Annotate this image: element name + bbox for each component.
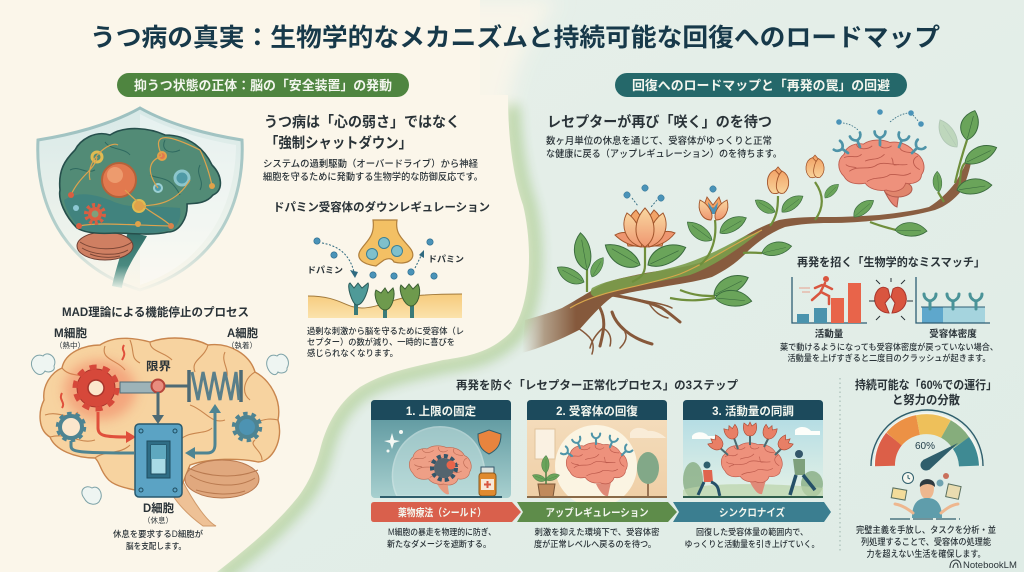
icon: steam clouds	[31, 354, 288, 504]
text block: waiting description: な健康に戻る（アップレギュレーション）のを待ちます。	[546, 148, 782, 160]
icon: shield with green brain	[38, 108, 242, 290]
text block: dopamine description: セプター）の数が減り、一時的に喜びを	[307, 336, 455, 347]
text block: shutdown description: 細胞を守るために発動する生物学的な防御反応です。	[263, 171, 483, 183]
diagram: MAD brain	[31, 326, 288, 526]
section header: right	[615, 73, 907, 97]
labels: cells: A細胞	[227, 326, 258, 340]
text block: step 1: 新たなダメージを遮断する。	[387, 538, 491, 549]
heading: mismatch: 再発を招く「生物学的なミスマッチ」	[797, 255, 985, 269]
panel: step 2: 2. 受容体の回復	[556, 404, 638, 418]
text block: D cell	[113, 528, 203, 551]
illustration: growth branch	[522, 108, 999, 354]
ribbon: step 3: シンクロナイズ	[719, 506, 785, 519]
mechanism: rod and spring	[120, 370, 241, 424]
ribbon: step 1: 薬物療法（シールド）	[398, 506, 486, 519]
heading: forced shutdown	[264, 114, 460, 152]
labels: axes: 受容体密度	[929, 328, 977, 340]
heading: three steps: 再発を防ぐ「レセプター正常化プロセス」の3ステップ	[456, 378, 738, 392]
icon: D-cell switch	[135, 424, 182, 497]
text block: dopamine description	[307, 325, 464, 358]
panel: step 3: 3. 活動量の同調	[712, 404, 794, 418]
chart: activity and receptor density mismatch	[792, 276, 990, 340]
text block: step 3: 回復した受容体量の範囲内で、	[696, 526, 808, 537]
section header: left: 抑うつ状態の正体：脳の「安全装置」の発動	[134, 78, 392, 93]
chart: activity bars	[792, 276, 867, 323]
trunk	[522, 157, 972, 353]
text block: mismatch description	[780, 341, 998, 363]
text block: step 3: ゆっくりと活動量を引き上げていく。	[684, 538, 820, 549]
text block: 60 percent description: 完璧主義を手放し、タスクを分析・並	[856, 524, 996, 535]
text block: dopamine description: 過剰な刺激から脳を守るために受容体（レ	[307, 325, 464, 336]
illustration: salmon brain with receptors	[834, 109, 925, 207]
icon: broken heart brain	[869, 278, 913, 320]
panel: step 1: 1. 上限の固定	[406, 405, 477, 418]
labels: axes	[815, 328, 977, 340]
section header: left	[117, 73, 409, 97]
ribbon: step 3	[673, 502, 831, 522]
text block: step 3	[684, 526, 820, 549]
labels: cells: （熱中）	[55, 340, 85, 350]
diagram: dopamine synapse: ドパミン	[307, 265, 343, 275]
icon: red gear	[75, 367, 117, 409]
heading: 60 percent: と努力の分散	[892, 392, 960, 407]
logo: NotebookLM: NotebookLM	[963, 560, 1017, 571]
panel: step 3	[683, 400, 823, 498]
arrows	[71, 404, 221, 459]
flower: lotus	[615, 208, 675, 247]
text block: step 2: 刺激を抑えた環境下で、受容体密	[534, 526, 660, 537]
labels: cells	[54, 326, 258, 525]
heading: forced shutdown: うつ病は「心の弱さ」ではなく	[264, 114, 460, 131]
ribbon: step 1	[371, 502, 521, 522]
chart: gauge 60%	[871, 410, 983, 470]
text block: step 1	[387, 526, 496, 549]
dots	[624, 185, 716, 201]
text block: mismatch description: 薬で動けるようになっても受容体密度が戻っていない場合、	[780, 341, 998, 352]
leaves	[554, 108, 999, 308]
chart: gauge 60%: 60%	[915, 441, 935, 452]
text block: D cell: 休息を要求するD細胞が	[113, 528, 203, 539]
diagram: dopamine synapse	[307, 220, 464, 318]
labels: cells: M細胞	[54, 326, 87, 340]
diagram: dopamine synapse: ドパミン	[428, 254, 464, 264]
labels: cells: D細胞	[143, 501, 174, 515]
text block: shutdown description	[263, 158, 483, 183]
roots	[578, 295, 680, 354]
heading: waiting for receptors: レセプターが再び「咲く」のを待つ	[547, 113, 772, 131]
heading: 60 percent	[855, 377, 997, 407]
icon: teal gears	[58, 414, 260, 440]
heading: 60 percent: 持続可能な「60%での運行」	[855, 377, 997, 392]
text block: waiting description: 数ヶ月単位の休息を通じて、受容体がゆっくりと正常	[546, 135, 772, 147]
text block: mismatch description: 活動量を上げすぎると二度目のクラッシュが起きます。	[788, 352, 990, 363]
heading: forced shutdown: 「強制シャットダウン」	[265, 134, 412, 152]
labels: axes: 活動量	[815, 328, 844, 340]
text block: step 2	[534, 526, 660, 549]
icon: person juggling tasks	[890, 472, 961, 519]
flower: opening tulip	[699, 197, 728, 220]
chart: receptor density	[916, 277, 990, 323]
text block: 60 percent description	[856, 524, 996, 559]
text block: step 2: 度が正常レベルへ戻るのを待つ。	[534, 538, 656, 549]
text block: dopamine description: 感じられなくなります。	[307, 347, 398, 358]
title: うつ病の真実：生物学的なメカニズムと持続可能な回復へのロードマップ	[90, 23, 940, 52]
panel: step 2	[527, 400, 667, 507]
text block: shutdown description: システムの過剰駆動（オーバードライブ）から神経	[263, 158, 478, 170]
stems	[587, 140, 967, 300]
labels: cells: 限界	[146, 360, 172, 373]
panel: step 1	[371, 400, 511, 498]
ribbon: step 2: アップレギュレーション	[546, 507, 648, 519]
flowers	[615, 155, 824, 247]
text block: waiting description	[546, 135, 782, 160]
text block: D cell: 脳を支配します。	[126, 540, 186, 551]
labels: cells: （休息）	[143, 515, 173, 525]
text block: 60 percent description: 力を超えない生活を確保します。	[866, 548, 986, 559]
section header: right: 回復へのロードマップと「再発の罠」の回避	[632, 78, 890, 93]
labels: cells: （執着）	[227, 340, 257, 350]
text block: 60 percent description: 列処理することで、受容体の処理能	[861, 536, 991, 547]
heading: MAD theory: MAD理論による機能停止のプロセス	[62, 305, 249, 319]
ribbon: step 2	[517, 502, 677, 522]
heading: dopamine: ドパミン受容体のダウンレギュレーション	[273, 200, 490, 214]
text block: step 1: M細胞の暴走を物理的に防ぎ、	[388, 526, 496, 537]
